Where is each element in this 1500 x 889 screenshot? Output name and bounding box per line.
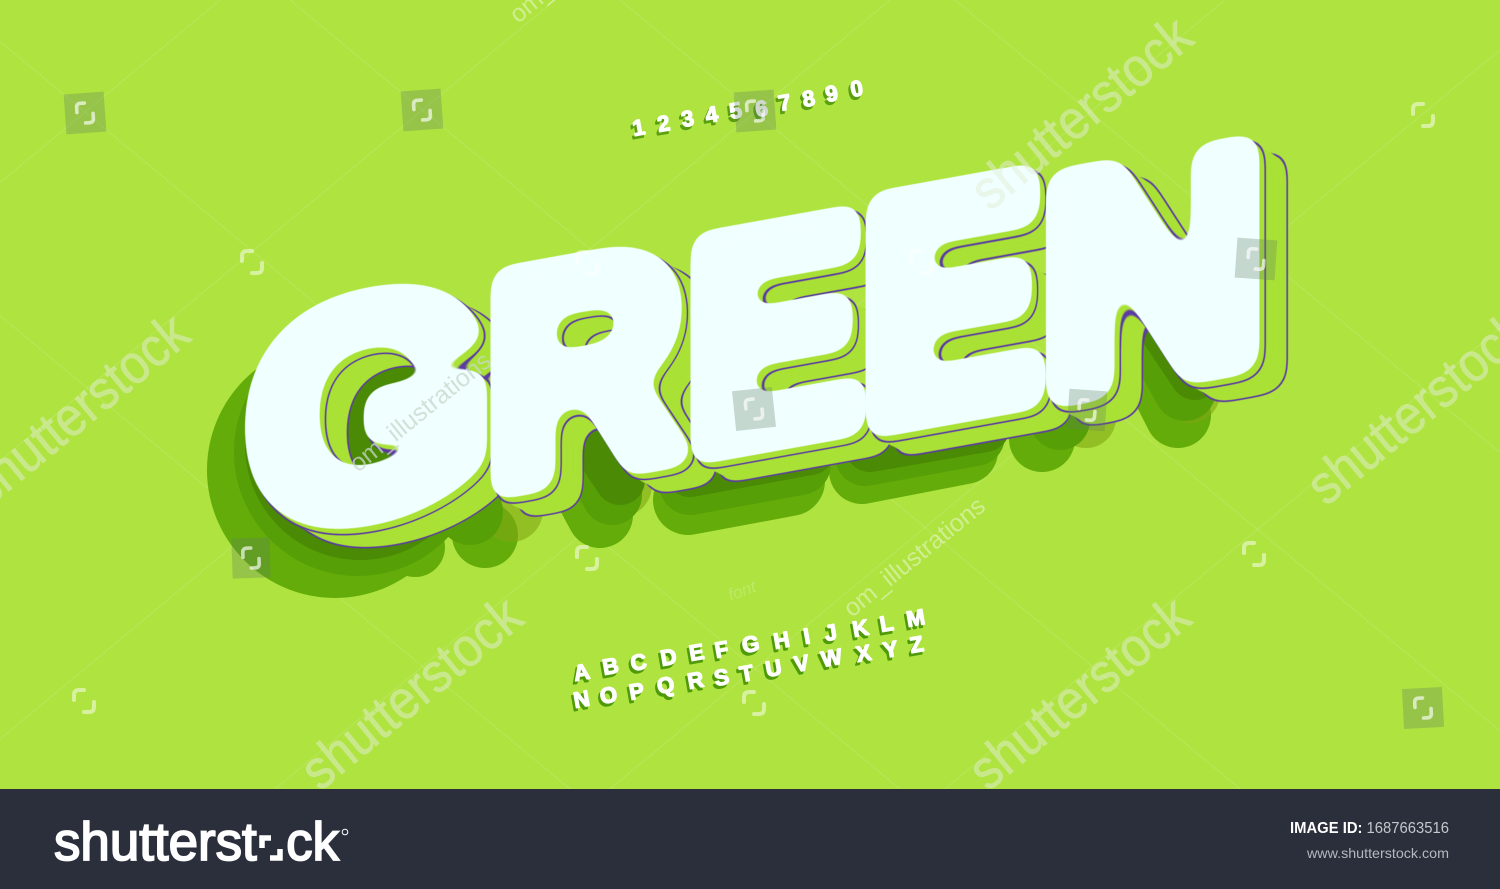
extrusion step 2 bbox=[261, 88, 1281, 607]
back extrusion face: G bbox=[273, 234, 519, 614]
extrusion step 2: E bbox=[874, 117, 1059, 506]
inner outline: R bbox=[489, 186, 690, 558]
inner outline: N bbox=[1044, 82, 1271, 469]
white front face: E bbox=[685, 150, 865, 518]
extrusion step 3: G bbox=[267, 230, 513, 610]
extrusion step 1: E bbox=[695, 158, 875, 526]
back extrusion face: E bbox=[712, 168, 892, 536]
extrusion step 3: R bbox=[505, 195, 706, 567]
watermark: shutterstock repeats: shutterstock bbox=[289, 584, 535, 802]
inner lip bbox=[251, 82, 1271, 601]
watermark small logo marks bbox=[74, 104, 1433, 714]
extrusion step 3: E bbox=[706, 164, 886, 532]
footer logo: shutterstock bbox=[54, 812, 340, 872]
inner outline: E bbox=[690, 155, 870, 523]
title: GREEN 3D lettering bbox=[246, 77, 1293, 614]
inner lip: R bbox=[489, 186, 690, 558]
olive translucent shadow blobs bbox=[479, 363, 1220, 542]
watermark square badges bbox=[64, 89, 1444, 729]
numerals face: 1234567890 bbox=[630, 75, 865, 141]
middle shadow layer bbox=[234, 310, 1185, 576]
inner outline bbox=[251, 82, 1271, 601]
back extrusion face: E bbox=[886, 124, 1071, 513]
white front face: N bbox=[1039, 77, 1266, 464]
alphabet row 1 shadow: ABCDEFGHIJKLM bbox=[570, 607, 925, 689]
extrusion step 1 bbox=[256, 85, 1276, 604]
extrusion step 1: G bbox=[256, 224, 502, 604]
extrusion step 1: N bbox=[1049, 85, 1276, 472]
white front face: R bbox=[484, 181, 685, 553]
watermark: om_illustrations repeats: om_illustrations bbox=[344, 347, 497, 478]
watermark: om_illustrations repeats bbox=[344, 0, 991, 623]
watermark: om_illustrations repeats: om_illustrations bbox=[838, 492, 991, 623]
inner lip: G bbox=[251, 221, 497, 601]
back extrusion outline: G bbox=[273, 234, 519, 614]
back extrusion face: N bbox=[1066, 95, 1293, 482]
extrusion step 3: N bbox=[1060, 91, 1287, 478]
back extrusion outline: E bbox=[712, 168, 892, 536]
back extrusion outline: R bbox=[511, 199, 712, 571]
white front face: E bbox=[860, 106, 1044, 495]
inner lip: N bbox=[1044, 82, 1271, 469]
inner lip: E bbox=[690, 155, 870, 523]
back extrusion outline bbox=[273, 95, 1293, 614]
extrusion step 2: N bbox=[1054, 88, 1281, 475]
footer image id: IMAGE ID: 1687663516 bbox=[1290, 820, 1449, 837]
footer bar bbox=[0, 789, 1500, 889]
faint font label: font bbox=[725, 577, 760, 605]
extrusion step 1: R bbox=[494, 189, 695, 561]
long drop shadow of the lettering bbox=[207, 300, 1220, 598]
back extrusion outline: E bbox=[886, 124, 1071, 513]
numerals shadow: 1234567890 bbox=[628, 78, 863, 144]
back extrusion face bbox=[273, 95, 1293, 614]
inner outline: E bbox=[864, 111, 1049, 500]
alphabet rows bbox=[570, 604, 927, 716]
numerals row bbox=[628, 75, 865, 144]
watermark: shutterstock repeats: shutterstock bbox=[959, 4, 1205, 222]
alphabet row 2 face: NOPQRSTUVWXYZ bbox=[572, 631, 925, 713]
extrusion step 3: E bbox=[880, 120, 1065, 509]
footer site url: www.shutterstock.com bbox=[1306, 845, 1449, 861]
alphabet row 1 face: ABCDEFGHIJKLM bbox=[572, 604, 927, 686]
white front face bbox=[246, 77, 1266, 596]
extrusion step 2: E bbox=[700, 161, 880, 529]
extrusion step 3 bbox=[267, 91, 1287, 610]
alphabet row 2 shadow: NOPQRSTUVWXYZ bbox=[570, 634, 923, 716]
inner outline: G bbox=[251, 221, 497, 601]
extrusion step 1: E bbox=[870, 114, 1054, 503]
lightest shadow layer bbox=[207, 330, 1178, 598]
inner lip: E bbox=[864, 111, 1049, 500]
white front face: G bbox=[246, 216, 492, 596]
back extrusion face: R bbox=[511, 199, 712, 571]
watermark: shutterstock repeats: shutterstock bbox=[957, 584, 1203, 802]
extrusion step 2: G bbox=[261, 227, 507, 607]
darkest shadow layer bbox=[245, 300, 1195, 560]
extrusion step 2: R bbox=[499, 192, 700, 564]
back extrusion outline: N bbox=[1066, 95, 1293, 482]
